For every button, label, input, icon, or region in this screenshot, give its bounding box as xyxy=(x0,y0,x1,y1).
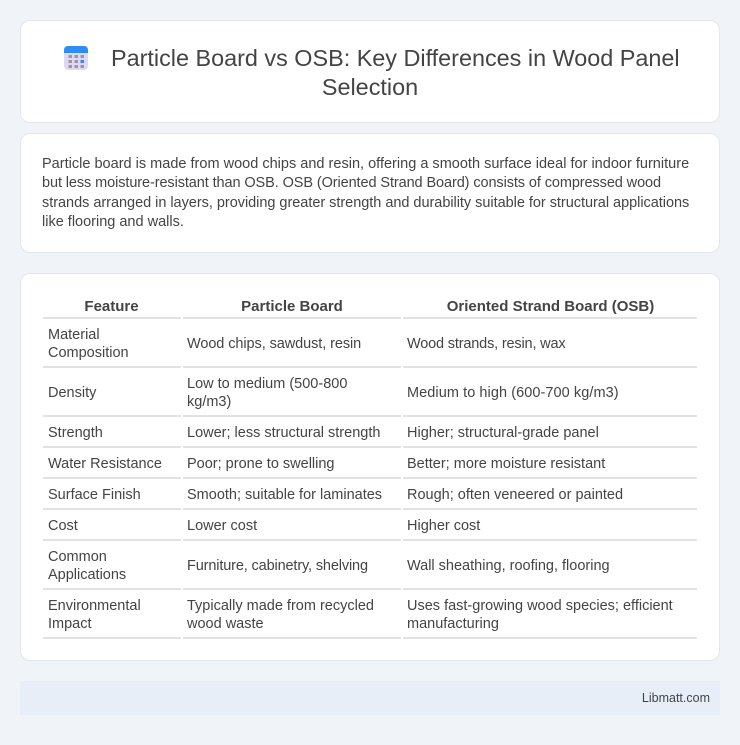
text: Wood chips, sawdust, resin xyxy=(187,336,361,352)
icon: calendar xyxy=(64,46,88,70)
text: Smooth; suitable for laminates xyxy=(187,487,382,503)
text: Typically made from recycled xyxy=(187,598,374,614)
table header: Particle Board xyxy=(241,298,343,315)
row: material composition: Material xyxy=(48,327,100,343)
text: kg/m3) xyxy=(187,394,231,410)
row: environmental impact xyxy=(48,598,141,632)
footer bar xyxy=(20,681,720,715)
text: Higher cost xyxy=(407,518,480,534)
row: common applications: Applications xyxy=(48,567,126,583)
text: Wall sheathing, roofing, flooring xyxy=(407,558,610,574)
title: Selection xyxy=(322,74,418,100)
table header: Feature xyxy=(84,298,139,315)
text: Furniture, cabinetry, shelving xyxy=(187,558,368,574)
text: Poor; prone to swelling xyxy=(187,456,334,472)
title: Particle Board vs OSB: Key Differences in Wood Panel xyxy=(111,45,680,71)
row: material composition: Composition xyxy=(48,345,129,361)
text: Low to medium (500-800 xyxy=(187,376,347,392)
row: environmental impact: Environmental xyxy=(48,598,141,614)
text: Lower cost xyxy=(187,518,257,534)
row: common applications: Common xyxy=(48,549,107,565)
panel: title card xyxy=(20,20,720,123)
row: water resistance: Water Resistance xyxy=(48,456,162,472)
text: Medium to high (600-700 kg/m3) xyxy=(407,385,619,401)
row: environmental impact: Impact xyxy=(48,616,92,632)
intro text: but less moisture-resistant than OSB. OSB (Oriented Strand Board) consists of compressed wood xyxy=(42,175,661,191)
text: Wood strands, resin, wax xyxy=(407,336,565,352)
footer credit: Libmatt.com xyxy=(642,691,710,705)
text: Rough; often veneered or painted xyxy=(407,487,623,503)
row: strength: Strength xyxy=(48,425,103,441)
intro text: like flooring and walls. xyxy=(42,214,184,230)
title xyxy=(111,45,680,100)
intro text xyxy=(42,156,689,230)
panel: introduction xyxy=(20,133,720,253)
intro text: strands arranged in layers, providing greater strength and durability suitable for structural applications xyxy=(42,195,689,211)
row: density: Density xyxy=(48,385,96,401)
row: surface finish: Surface Finish xyxy=(48,487,141,503)
intro text: Particle board is made from wood chips and resin, offering a smooth surface ideal for indoor furniture xyxy=(42,156,689,172)
table header xyxy=(84,298,654,315)
row: material composition xyxy=(48,327,129,361)
text: Lower; less structural strength xyxy=(187,425,380,441)
text: wood waste xyxy=(187,616,264,632)
text: manufacturing xyxy=(407,616,499,632)
text: Uses fast-growing wood species; efficient xyxy=(407,598,673,614)
text: Better; more moisture resistant xyxy=(407,456,605,472)
table header: Oriented Strand Board (OSB) xyxy=(447,298,654,315)
text: Higher; structural-grade panel xyxy=(407,425,599,441)
row: cost: Cost xyxy=(48,518,78,534)
row: common applications xyxy=(48,549,126,583)
panel: comparison table xyxy=(20,273,720,661)
